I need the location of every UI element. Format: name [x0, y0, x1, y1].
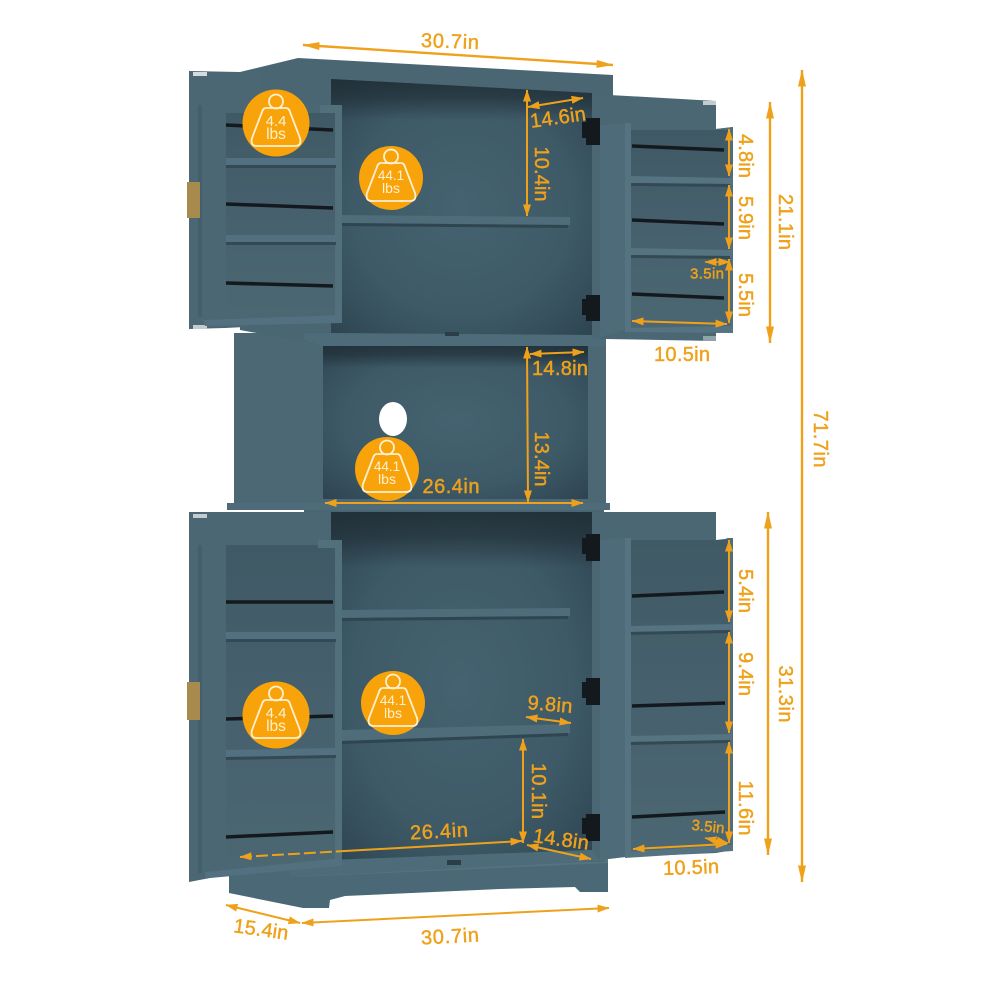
weight badge: door 4.4 lbs bottom: 4.4 — [266, 705, 286, 722]
dimension: door shelf depth 3.5in lower: 3.5in — [691, 817, 725, 837]
weight badge: door 4.4 lbs top: 4.4 — [266, 113, 286, 130]
dimension: top height 10.4in — [527, 90, 552, 216]
bottom left door — [187, 512, 342, 882]
weight badge: shelf 44.1 lbs middle — [355, 437, 419, 501]
dimension: base depth 15.4in — [226, 905, 300, 945]
top cabinet shelf — [342, 215, 570, 225]
dimension: total height 71.7in: 71.7in — [809, 410, 831, 468]
weight badge: shelf 44.1 lbs middle: lbs — [378, 471, 396, 487]
black hinges — [582, 534, 600, 841]
weight badge: shelf 44.1 lbs bottom — [361, 671, 425, 735]
dimension: door 5.9in — [729, 185, 756, 249]
weight badge: shelf 44.1 lbs top — [359, 146, 423, 210]
brass hinge — [187, 182, 200, 218]
dimension: shelf depth 9.8in: 9.8in — [527, 692, 573, 718]
dimension: door 9.4in: 9.4in — [734, 652, 756, 696]
dimension: door width 10.5in upper — [632, 321, 727, 366]
weight badge: door 4.4 lbs top — [242, 90, 310, 156]
dimension: door 11.6in — [729, 742, 756, 843]
middle open section — [227, 333, 610, 510]
middle shelf lip — [227, 503, 610, 510]
dimension: upper height 21.1in: 21.1in — [774, 194, 796, 250]
dimension: lower height 10.1in: 10.1in — [527, 763, 549, 819]
dimension: base depth 15.4in: 15.4in — [232, 915, 290, 945]
dimension: door 11.6in: 11.6in — [734, 780, 756, 836]
dimension: top height 10.4in: 10.4in — [530, 146, 552, 202]
weight badge: shelf 44.1 lbs bottom: 44.1 — [380, 693, 406, 708]
bottom cabinet shelves — [342, 608, 570, 618]
cabinet floor — [290, 850, 606, 877]
black hinges — [582, 118, 600, 321]
top right door — [582, 94, 733, 341]
weight badge: door 4.4 lbs top: lbs — [266, 126, 286, 143]
base plinth — [229, 856, 608, 908]
dimension: door 5.5in — [729, 259, 756, 323]
dimension: door 4.8in: 4.8in — [734, 134, 756, 178]
weight badge: door 4.4 lbs bottom — [242, 682, 310, 748]
weight badge: shelf 44.1 lbs middle: 44.1 — [374, 459, 400, 474]
dimension: door 5.9in: 5.9in — [734, 196, 756, 240]
top left door — [187, 71, 342, 329]
top cabinet body — [240, 58, 613, 346]
dimension: door 5.4in: 5.4in — [734, 569, 756, 613]
dimension: door 5.4in — [729, 540, 756, 622]
dimension: top depth 14.6in: 14.6in — [529, 103, 587, 133]
dimension: top width 30.7in — [303, 30, 613, 65]
dimension: base width 30.7in — [302, 908, 609, 950]
cable hole — [379, 402, 407, 436]
dimension: top width 30.7in: 30.7in — [421, 30, 479, 54]
dimension: middle width 26.4in: 26.4in — [422, 476, 480, 498]
cabinet illustration — [187, 58, 733, 908]
dimension: lower height 10.1in — [523, 739, 549, 843]
lower rail — [304, 333, 606, 346]
bottom cabinet body — [290, 510, 606, 877]
dimension: lower height 31.3in: 31.3in — [774, 666, 796, 722]
weight badge: door 4.4 lbs bottom: lbs — [266, 718, 286, 735]
weight badge: shelf 44.1 lbs top: 44.1 — [378, 168, 404, 183]
dimension: door width 10.5in lower — [633, 844, 727, 880]
dimension: door 5.5in: 5.5in — [734, 273, 756, 317]
bottom right door — [582, 512, 733, 860]
dimension: lower width 26.4in — [240, 819, 522, 857]
dimension: door 9.4in — [729, 632, 756, 733]
dimension: base width 30.7in: 30.7in — [420, 924, 480, 950]
dimension: door width 10.5in upper: 10.5in — [654, 344, 710, 366]
weight badge: shelf 44.1 lbs bottom: lbs — [384, 705, 402, 721]
dimension: middle depth 14.8in: 14.8in — [532, 358, 588, 380]
brass hinge — [187, 682, 200, 720]
dimension: lower width 26.4in: 26.4in — [409, 819, 469, 845]
weight badge: shelf 44.1 lbs top: lbs — [382, 180, 400, 196]
dimension: lower depth 14.8in: 14.8in — [532, 825, 590, 855]
dimension: middle height 13.4in: 13.4in — [530, 432, 552, 486]
dimension: door width 10.5in lower: 10.5in — [663, 856, 719, 880]
dimension: door shelf depth 3.5in upper: 3.5in — [690, 266, 724, 282]
